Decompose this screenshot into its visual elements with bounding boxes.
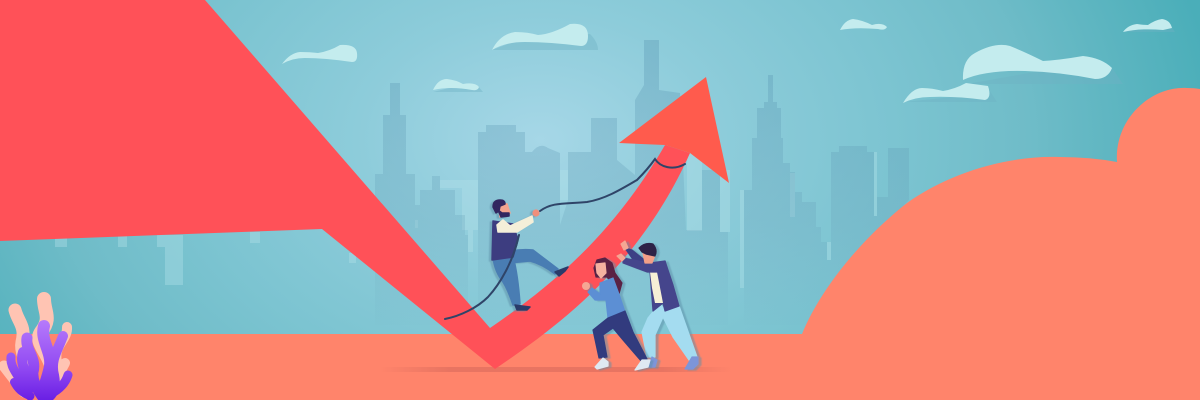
shirt <box>650 272 663 303</box>
face <box>596 263 606 278</box>
face <box>643 253 655 263</box>
ground <box>0 334 1200 400</box>
arm <box>497 216 533 232</box>
hair <box>594 258 622 294</box>
clouds <box>282 19 1175 103</box>
hair and beard <box>493 200 509 217</box>
shoes <box>648 357 698 369</box>
standing leg <box>493 256 520 305</box>
hair <box>639 244 656 256</box>
arm <box>623 258 668 272</box>
lower rope <box>445 235 519 319</box>
face <box>498 203 510 217</box>
city skyline <box>55 40 909 325</box>
top <box>588 278 625 318</box>
trousers <box>593 311 647 362</box>
raised leg <box>509 250 558 274</box>
shoes <box>515 267 568 310</box>
vest <box>492 221 518 260</box>
person: climbing man <box>492 200 568 310</box>
plant <box>4 299 68 396</box>
arrow head <box>619 77 729 183</box>
jacket <box>650 261 679 311</box>
hands <box>617 241 628 261</box>
hand <box>532 209 540 217</box>
person: pushing man <box>617 241 698 369</box>
person: pushing woman <box>582 258 650 370</box>
upper arm <box>625 248 647 267</box>
upper rope <box>540 159 685 211</box>
cloud shapes <box>282 19 1172 103</box>
cloud shadows <box>433 24 1175 102</box>
hand <box>582 282 590 290</box>
peach stalks <box>4 299 67 392</box>
purple stalks <box>11 326 68 396</box>
hill <box>802 88 1200 340</box>
shoes <box>595 358 650 370</box>
trousers <box>642 303 697 360</box>
arrow shaft: falling and rising red line <box>0 0 690 369</box>
ground shadow <box>380 367 732 372</box>
